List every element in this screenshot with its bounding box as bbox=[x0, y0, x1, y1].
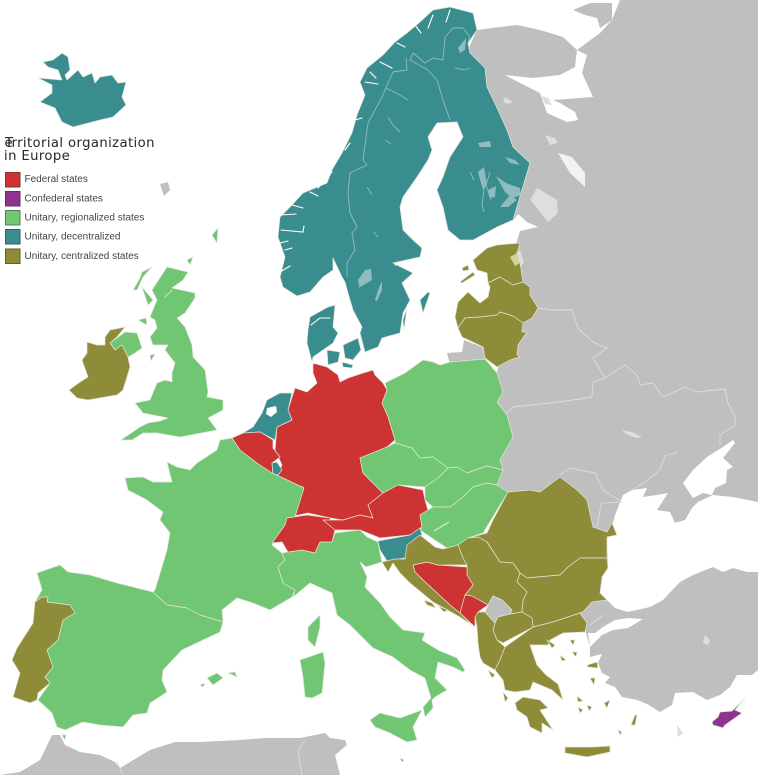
Switzerland bbox=[272, 515, 335, 553]
legend title: in Europe bbox=[4, 149, 70, 164]
Estonia bbox=[460, 243, 523, 285]
Kosovo bbox=[485, 596, 512, 623]
Belgium bbox=[232, 432, 280, 475]
Great Britain bbox=[121, 228, 223, 440]
Gotland and Oland bbox=[403, 292, 430, 330]
legend: confederal states bbox=[6, 192, 103, 206]
legend title: Territorial organization bbox=[4, 136, 155, 151]
Nordic states bbox=[278, 7, 530, 352]
Italy bbox=[278, 530, 465, 742]
legend: unitary decentralized bbox=[6, 230, 120, 244]
Denmark bbox=[307, 305, 361, 368]
legend: unitary regionalized states: Unitary, regionalized states bbox=[24, 212, 144, 224]
Spain bbox=[35, 565, 237, 740]
Bosnia and Herzegovina bbox=[413, 562, 473, 613]
Malta bbox=[400, 758, 404, 762]
France bbox=[125, 438, 320, 647]
Ireland bbox=[69, 327, 130, 400]
Romania bbox=[468, 477, 617, 578]
Latvia bbox=[455, 277, 538, 328]
Greece bbox=[488, 613, 637, 757]
legend title bbox=[4, 136, 155, 164]
Montenegro bbox=[460, 595, 488, 627]
legend: unitary decentralized: Unitary, decentralized bbox=[24, 232, 120, 242]
Albania bbox=[475, 612, 505, 670]
legend: unitary centralized states bbox=[6, 249, 139, 264]
Lithuania bbox=[458, 312, 527, 367]
Portugal bbox=[12, 597, 75, 703]
Cyprus bbox=[712, 698, 745, 728]
Serbia bbox=[458, 537, 527, 614]
Poland bbox=[382, 359, 513, 473]
Slovakia bbox=[425, 466, 503, 507]
Bulgaria bbox=[517, 558, 608, 627]
legend: federal states bbox=[6, 172, 88, 187]
Netherlands bbox=[243, 393, 292, 440]
Croatia bbox=[382, 535, 472, 625]
legend: confederal states: Confederal states bbox=[24, 194, 103, 204]
legend: federal states: Federal states bbox=[24, 174, 88, 185]
Slovenia bbox=[378, 528, 422, 561]
Germany bbox=[275, 363, 395, 520]
legend: unitary centralized states: Unitary, centralized states bbox=[24, 251, 139, 262]
Luxembourg bbox=[272, 462, 282, 475]
Austria bbox=[323, 485, 428, 538]
Hungary bbox=[420, 483, 508, 548]
Iceland bbox=[38, 53, 126, 127]
Northern Ireland bbox=[110, 332, 142, 357]
Czechia bbox=[360, 443, 448, 493]
North Macedonia bbox=[493, 612, 533, 643]
legend: unitary regionalized states bbox=[6, 210, 144, 225]
